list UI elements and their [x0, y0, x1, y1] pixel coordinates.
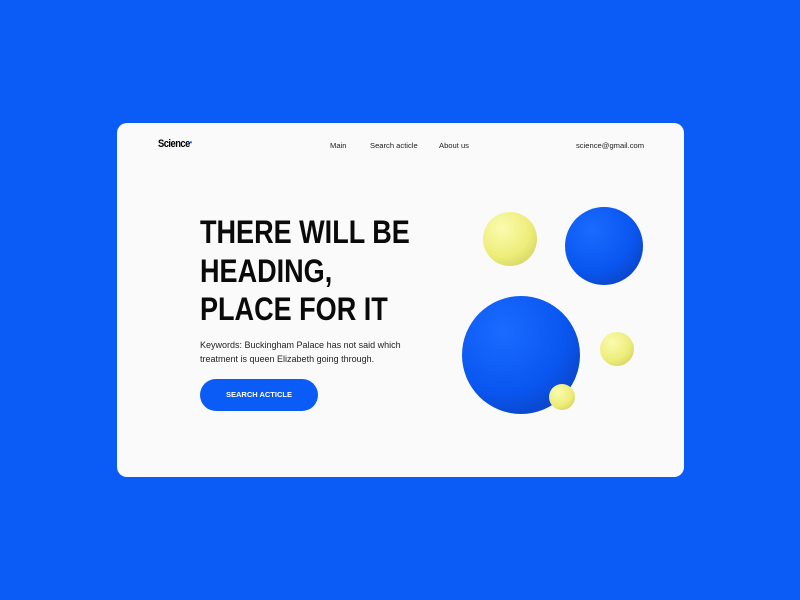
button: search: SEARCH ACTICLE: [226, 390, 292, 399]
sphere: yellow top: [483, 212, 537, 266]
heading: PLACE FOR IT: [200, 291, 388, 327]
sphere: yellow right: [600, 332, 634, 366]
text block: keywords: treatment is queen Elizabeth going through.: [200, 354, 374, 364]
sphere: small yellow: [549, 384, 575, 410]
nav: Search acticle: Search acticle: [370, 141, 418, 150]
nav: Main: Main: [330, 141, 346, 150]
text block: keywords: [200, 340, 401, 364]
email: science@gmail.com: [576, 141, 644, 150]
panel: card: [117, 123, 684, 477]
sphere: big blue: [462, 296, 580, 414]
button: search: [200, 379, 318, 411]
heading: THERE WILL BE: [200, 214, 410, 250]
heading: [200, 214, 410, 327]
sphere: blue top: [565, 207, 643, 285]
heading: HEADING,: [200, 252, 332, 288]
text block: keywords: Keywords: Buckingham Palace has not said which: [200, 340, 401, 350]
logo: Science•: [158, 138, 192, 150]
nav: About us: About us: [439, 141, 469, 150]
